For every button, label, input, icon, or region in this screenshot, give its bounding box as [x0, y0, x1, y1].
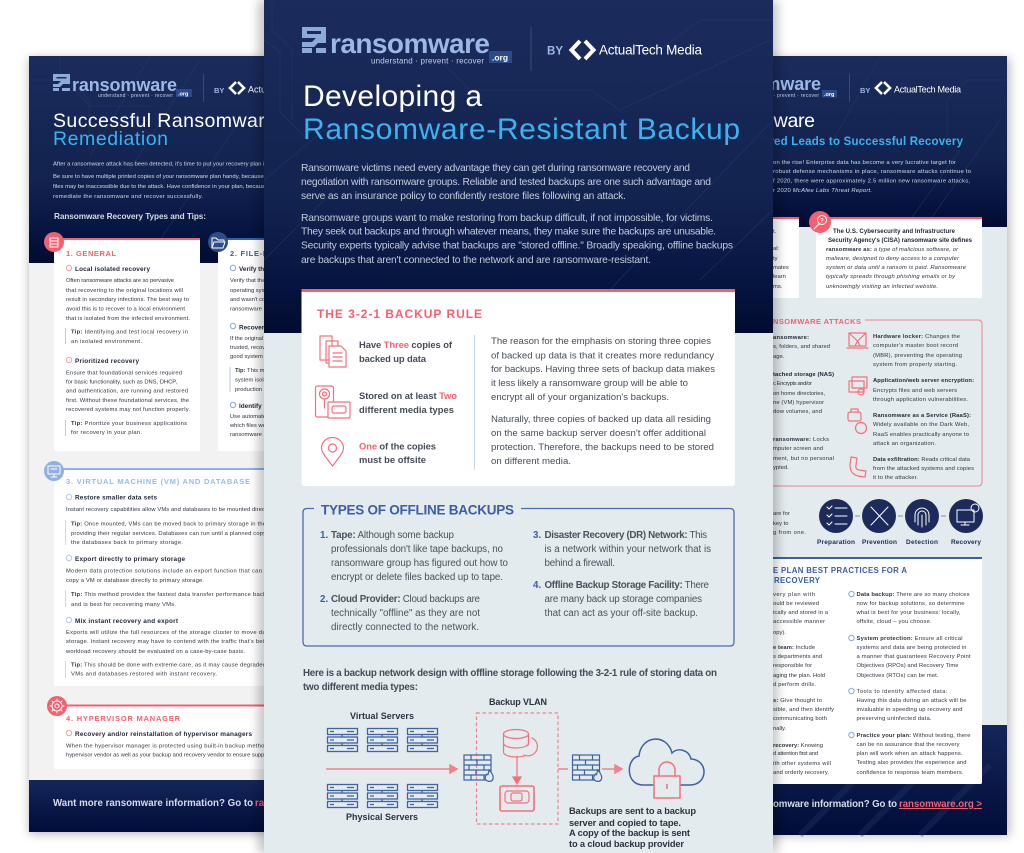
footer band: omware information? Go to — [773, 799, 897, 810]
intro text — [301, 163, 733, 266]
arrow: database to tape — [513, 756, 521, 784]
card: plan best practices: e team: Include — [773, 645, 815, 651]
card: 4. Hypervisor manager: When the hypervisor manager is protected using built-in backup methods — [66, 744, 271, 750]
logo: ransomware.org small: ransomware — [72, 75, 177, 95]
card: 2. File-level: production — [235, 387, 262, 393]
card: plan best practices: s departments and — [773, 654, 822, 660]
card: 3. Virtual machine and database: Modern data protection solutions include an export function that can be — [66, 569, 271, 575]
by ActualTech Media — [547, 41, 702, 59]
list: cloud provider: technically "offline" as they are not — [331, 608, 480, 619]
card: plan best practices: ically and stored in a — [773, 610, 829, 616]
card: small definition card: t. — [773, 229, 777, 235]
card: 1. General: for recovery in your plan. — [71, 430, 142, 436]
card: 3. Virtual machine and database: and is best for recovering many VMs. — [71, 602, 176, 608]
card: 1. General: 1. GENERAL — [66, 249, 116, 258]
card: 3. Virtual machine and database: Tip: Once mounted, VMs can be moved back to primary storage in the — [71, 522, 266, 528]
text: explanation: Naturally, three copies of backed up data all residing — [491, 414, 711, 425]
card: plan best practices: ould be reviewed — [773, 601, 819, 607]
icon: gear — [47, 696, 67, 716]
text: diagram caption — [569, 806, 696, 849]
card: 2. File-level: ransomware — [230, 306, 262, 312]
diagram: backup network — [326, 697, 704, 849]
panel: ransomware attacks: through application vulnerabilities. — [873, 397, 968, 403]
process flow: preparation to recovery — [817, 499, 983, 546]
card: 2. File-level: and wasn't compromised — [230, 297, 294, 303]
title: Being Prepared Leads to Successful Recovery — [700, 136, 964, 148]
panel: ransomware attacks: Application/web server encryption: — [873, 378, 974, 384]
card: 1. General: Local isolated recovery — [75, 266, 150, 273]
process flow: preparation to recovery: Preparation — [817, 539, 855, 546]
intro text: Ransomware victims need every advantage they can get during ransomware recovery and — [301, 163, 690, 174]
card: 1. General: Prioritized recovery — [75, 358, 139, 365]
list: cloud provider: 2. — [320, 594, 328, 605]
card: plan best practices: aging the plan. Hold — [773, 673, 825, 679]
intro text: They seek out backups and through whatever means, they make sure the backups are unusable. — [301, 226, 716, 238]
card: 3. Virtual machine and database — [44, 461, 284, 686]
card: 4. Hypervisor manager — [47, 696, 284, 769]
card: plan best practices: Data backup: There are so many choices — [856, 592, 970, 598]
intro text: f 2020, there were approximately 2.5 million new ransomware attacks, — [773, 178, 970, 184]
footer band — [740, 725, 1007, 835]
card: plan best practices: systems and data are being protected in — [856, 645, 966, 651]
panel: ransomware attacks: mputer screen and — [773, 446, 823, 452]
card: plan best practices: System protection: Ensure all critical — [856, 636, 962, 642]
panel: ransomware attacks: c Encrypts and/or — [773, 381, 812, 387]
virtual servers: Virtual Servers — [350, 711, 414, 721]
intro text: files may be inaccessible due to the attack. Have confidence in your plan, because it will help — [53, 184, 296, 190]
title: Ransomware-Resistant Backup — [303, 113, 740, 146]
panel: ransomware attacks: it to the attacker. — [873, 475, 918, 481]
card: 2. File-level: operating system — [230, 288, 274, 294]
panel: ransomware attacks: Data exfiltration: Reads critical data — [873, 457, 971, 463]
card: 1. General: Tip: Identifying and test local recovery in — [71, 330, 188, 336]
card: plan best practices: can be no assurance that the recovery — [856, 742, 960, 748]
card: plan best practices: Practice your plan: Without testing, there — [856, 733, 970, 739]
footer band: ransomware.org > — [899, 799, 982, 810]
text: one offsite: One of the copies — [359, 440, 436, 452]
text: network intro: two different media types: — [303, 682, 418, 693]
intro text: remediate the ransomware and recover successfully. — [53, 194, 203, 200]
panel: ransomware attacks: ransomware: Locks — [773, 437, 829, 443]
title — [700, 110, 964, 148]
arrow: servers to firewall — [326, 765, 457, 773]
by ActualTech Media: BY — [860, 86, 870, 95]
panel: ransomware attacks: ment, but no personal — [773, 456, 834, 462]
icon: magnet — [850, 457, 866, 477]
subheading: Ransomware Recovery Types and Tips: — [54, 212, 206, 221]
text: two media types: different media types — [359, 404, 454, 415]
card: small definition card: mates — [773, 265, 789, 271]
intro text: After a ransomware attack has been detected, it's time to put your recovery plan into action. — [53, 162, 292, 168]
text: network intro: Here is a backup network design with offline storage following the 3-2-1 rule of storing data on — [303, 668, 717, 679]
logo: ransomware.org small: ransomware — [716, 74, 821, 94]
icon: monitor — [44, 461, 64, 481]
panel: ransomware attacks: Ransomware as a Service (RaaS): — [873, 413, 971, 419]
intro text: r 2020 McAfee Labs Threat Report. — [773, 188, 872, 194]
text: diagram caption: to a cloud backup provider — [569, 839, 684, 849]
text: three copies — [359, 339, 453, 364]
list: cloud provider: directly connected to the network. — [331, 622, 479, 633]
panel: ransomware attacks: Widely available on the Dark Web, — [873, 422, 969, 428]
card: plan best practices: E PLAN BEST PRACTICES FOR A — [773, 566, 907, 575]
card: 1. General: recovered systems may not function properly. — [66, 407, 190, 413]
card: 2. File-level: Recovered — [239, 324, 272, 332]
logo: ransomware.org: ransomware — [330, 28, 490, 59]
panel: ransomware attacks: NSOMWARE ATTACKS — [773, 317, 861, 326]
card: 3. Virtual machine and database: 3. VIRTUAL MACHINE (VM) AND DATABASE — [66, 477, 250, 486]
backup VLAN — [476, 697, 558, 824]
list: disaster recovery: Disaster Recovery (DR) Network: This — [544, 530, 707, 541]
title: Ransomware — [703, 110, 815, 132]
card: CISA definition: malware, designed to deny access to a computer — [826, 256, 960, 262]
card: 2. File-level: good system — [230, 354, 263, 360]
icon: hardware locker — [847, 333, 868, 348]
list: tape — [320, 530, 509, 583]
intro text: serve as an insurance policy to confidently restore files following an attack. — [301, 191, 626, 202]
card: 3. Virtual machine and database: copy a VM or database directly to primary storage. — [66, 578, 204, 584]
card: small definition card: ty — [773, 256, 778, 262]
text: diagram caption: server and copied to tape. — [569, 818, 681, 828]
icon: firewall 2 — [572, 755, 602, 781]
card: 3. Virtual machine and database: Restore smaller data sets — [75, 494, 157, 502]
text: process intro fragment: g from one. — [773, 530, 806, 536]
card: plan best practices: Tools to identify affected data: — [856, 689, 948, 695]
by ActualTech Media: BY — [214, 86, 224, 95]
icon: firewall 1 — [464, 755, 493, 781]
by ActualTech Media: ActualTech — [248, 84, 292, 94]
heading: THE 3-2-1 BACKUP RULE — [317, 307, 482, 321]
footer band — [29, 780, 330, 832]
panel: ransomware attacks: from the attacked systems and copies — [873, 466, 974, 472]
card: plan best practices: a manner that guarantees Recovery Point — [856, 654, 971, 660]
card: plan best practices: sible, and then identify — [773, 707, 834, 713]
by ActualTech Media — [214, 82, 292, 95]
title — [53, 110, 276, 150]
logo: ransomware.org small — [716, 74, 837, 99]
list: tape: professionals don't like tape backups, no — [331, 544, 504, 555]
icon: general recovery — [44, 232, 64, 252]
card: plan best practices: now for backup solutions, so determine — [856, 601, 964, 607]
card: plan best practices: responsible for — [773, 663, 812, 669]
intro text: negotiation with ransomware groups. Reliable and tested backups are one such advantage and — [301, 177, 711, 188]
title: Remediation — [53, 128, 168, 150]
card: 3. Virtual machine and database: Mix instant recovery and export — [75, 618, 179, 625]
text: explanation — [491, 336, 715, 467]
panel: ransomware attacks: RaaS enables practically anyone to — [873, 432, 969, 438]
physical servers: Physical Servers — [346, 812, 418, 822]
card: 3. Virtual machine and database: the databases back to primary storage. — [71, 540, 183, 546]
intro text — [773, 160, 972, 194]
card: plan best practices: offsite, cloud – you choose. — [856, 619, 932, 625]
text: two media types — [359, 390, 457, 415]
card: plan best practices: RECOVERY — [774, 576, 821, 585]
card: CISA definition: typically spreads through phishing emails or by — [826, 274, 956, 280]
panel: ransomware attacks: Hardware locker: Changes the — [873, 334, 960, 340]
card: 1. General: avoid this is to recover to a local environment — [66, 306, 185, 312]
logo: ransomware.org: .org — [492, 52, 508, 62]
card: plan best practices: Testing also provides the experience and — [856, 760, 966, 766]
card: CISA definition: system or data until a ransom is paid. Ransomware — [826, 265, 967, 271]
card: CISA definition: Security Agency's (CISA) ransomware site defines — [828, 237, 973, 244]
card: CISA definition: ransomware as: a type of malicious software, or — [826, 247, 959, 253]
card: 2. File-level: If the original — [230, 336, 263, 342]
logo: ransomware.org small: .org — [824, 92, 834, 98]
card: 3. Virtual machine and database: Tip: This method provides the fastest data transfer performance back — [71, 592, 266, 598]
backup VLAN: Backup VLAN — [489, 697, 547, 707]
virtual servers — [328, 711, 438, 752]
process flow: preparation to recovery: Recovery — [951, 539, 981, 546]
panel: center page, Developing a Ransomware-Resistant Backup — [258, 0, 778, 853]
card: small definition card — [745, 217, 799, 298]
icon: drive and tape — [316, 386, 350, 418]
card: 1. General: Ensure that foundational services required — [66, 370, 182, 376]
card: plan best practices: invaluable in speeding up recovery and — [856, 707, 962, 713]
text: explanation: on different media. — [491, 456, 571, 467]
card: 2. File-level: 2. FILE-LEVEL — [230, 249, 290, 258]
icon: cloud with lock — [629, 739, 704, 798]
card: 2. File-level: Verify the — [239, 266, 268, 273]
text: three copies: backed up data — [359, 353, 427, 364]
list: disaster recovery: is a network within your network that is — [544, 544, 711, 555]
text: one offsite: must be offsite — [359, 454, 426, 465]
panel: ransomware attacks: Encrypts files and web servers — [873, 388, 957, 394]
text: process intro fragment — [773, 511, 806, 536]
list: tape: encrypt or delete files backed up to tape. — [331, 572, 503, 583]
icon: database — [504, 730, 537, 757]
list: offline storage facility: Offline Backup Storage Facility: There — [544, 580, 710, 591]
intro text: Security experts typically advise that backups are "stored offline." Broadly speaking, offline backups — [301, 240, 733, 252]
card: plan best practices: very plan with — [773, 592, 815, 598]
card: 3. Virtual machine and database: storage. Instant recovery may have to contend with the traffic that's being — [66, 639, 271, 645]
text: explanation: encrypt all of your organization's backups. — [491, 392, 669, 403]
card: 1. General: first. Without these foundational services, the — [66, 398, 189, 404]
card: plan best practices: s: Give thought to — [773, 698, 822, 704]
card: 2. File-level: Tip: This may — [235, 368, 271, 374]
panel: the 3-2-1 backup rule — [302, 289, 735, 486]
list: offline storage facility — [533, 580, 710, 619]
list: disaster recovery — [533, 530, 711, 569]
text: process intro fragment: are for — [773, 511, 790, 517]
card: plan best practices: recovery: Knowing — [773, 743, 823, 749]
list: disaster recovery: behind a firewall. — [544, 558, 615, 569]
card: small definition card: ms. — [773, 284, 783, 290]
card: 1. General: that recovering to the original locations will — [66, 288, 183, 294]
arrow: firewall to cloud — [602, 765, 622, 773]
footer band: Want more ransomware information? Go to — [53, 798, 253, 809]
logo: ransomware.org small — [53, 74, 192, 99]
card: 1. General: Tip: Prioritize your business applications — [71, 421, 187, 427]
by ActualTech Media: BY — [547, 46, 563, 58]
card: 1. General: that is isolated from the infected environment. — [66, 316, 190, 322]
panel: ransomware attacks: ypted. — [773, 465, 789, 471]
card: 1. General: result in secondary infections. The best way to — [66, 297, 189, 303]
list: offline storage facility: 4. — [533, 580, 541, 591]
card: CISA definition: unknowingly visiting an infected website. — [826, 284, 938, 290]
text: explanation: of backed up data is that it creates more redundancy — [491, 350, 714, 362]
logo: ransomware.org small: understand · prevent · recover — [744, 93, 819, 99]
connector to firewall 2 — [558, 768, 568, 770]
card: plan best practices: preserving uninfected data. — [856, 716, 932, 722]
logo: ransomware.org: understand · prevent · recover — [371, 56, 484, 66]
intro text: Be sure to have multiple printed copies of your ransomware plan handy, because your — [53, 174, 277, 180]
intro text: are backups that aren't connected to the network and are ransomware-resistant. — [301, 255, 651, 266]
logo: ransomware.org — [302, 27, 512, 66]
card: plan best practices: Objectives (RPOs) and Recovery Time — [856, 663, 958, 669]
panel: ransomware attacks — [745, 317, 982, 486]
card: 1. General: and authentication, are running and restored — [66, 388, 188, 394]
card: 2. File-level: Identify — [239, 403, 262, 410]
panel: ransomware attacks: dow volumes, and — [773, 409, 822, 415]
list: cloud provider — [320, 594, 481, 633]
panel: ransomware attacks: system from properly starting. — [873, 362, 957, 368]
icon: documents — [320, 336, 346, 367]
card: plan best practices: opy). — [773, 630, 786, 636]
list: tape: 1. — [320, 530, 328, 541]
card: plan best practices — [745, 557, 982, 784]
panel: ransomware attacks: attack an organization. — [873, 441, 936, 447]
text: explanation: protection. Therefore, the backups need to be stored — [491, 442, 714, 453]
card: plan best practices: d attention first and — [773, 751, 818, 757]
panel: ransomware attacks: ne (VM) hypervisor — [773, 400, 824, 406]
heading: TYPES OF OFFLINE BACKUPS — [321, 502, 514, 518]
panel: ransomware attacks: s, folders, and shared — [773, 344, 830, 350]
card: CISA definition — [809, 211, 982, 298]
text: one offsite — [359, 440, 436, 465]
process flow: preparation to recovery: Detection — [906, 539, 938, 546]
card: small definition card: al: — [773, 246, 780, 252]
card: plan best practices: Objectives (RTOs) can be met. — [856, 673, 939, 679]
text: explanation: it less likely a ransomware group will be able to — [491, 378, 688, 389]
text: explanation: for backups. Having three sets of backup data makes — [491, 364, 715, 375]
list: tape: ransomware group has figured out how to — [331, 558, 509, 569]
card: plan best practices: and orderly recovery. — [773, 770, 829, 776]
intro text: robust defense mechanisms in place, ransomware attacks continue to — [773, 169, 972, 175]
text: diagram caption: A copy of the backup is sent — [569, 828, 690, 838]
icon: application encryption — [849, 377, 867, 395]
card: 4. Hypervisor manager: Recovery and/or reinstallation of hypervisor managers — [75, 731, 252, 738]
card: 3. Virtual machine and database: Exports will utilize the full resources of the storage cluster to move data — [66, 630, 272, 636]
title: Developing a — [303, 80, 482, 113]
text: process intro fragment: key to — [773, 521, 788, 527]
card: plan best practices: confidence to response team members. — [856, 770, 964, 776]
card: 2. File-level — [208, 232, 294, 451]
card: plan best practices: what is best for your business: locally, — [856, 610, 961, 616]
card: 2. File-level: ransomware — [230, 432, 262, 438]
panel: left page, Successful Ransomware Remediation — [29, 56, 330, 834]
card: 2. File-level: Verify that the — [230, 278, 265, 284]
card: 2. File-level: Use automated — [230, 414, 269, 420]
by ActualTech Media: ActualTech Media — [894, 84, 961, 94]
logo: ransomware.org small: .org — [178, 92, 188, 98]
card: 2. File-level: which files were — [229, 423, 271, 429]
icon: folder — [208, 232, 228, 252]
intro text: on the rise! Enterprise data has become a very lucrative target for — [773, 160, 956, 166]
card: 2. File-level: system isolated — [235, 378, 275, 384]
card: 3. Virtual machine and database: Tip: This should be done with extreme care, as it may cause degraded — [71, 663, 266, 669]
footer band: ransomware.org — [255, 798, 330, 809]
card: 4. Hypervisor manager: hypervisor vendor as well as your backup and recovery vendor to ensure support — [66, 753, 271, 759]
card: plan best practices: nally. — [773, 726, 786, 732]
icon: magnifier — [809, 211, 831, 233]
intro text: Ransomware groups want to make restoring from backup difficult, if not impossible, for victims. — [301, 213, 713, 224]
card: 4. Hypervisor manager: 4. HYPERVISOR MANAGER — [66, 714, 181, 723]
title: Successful Ransomware — [53, 110, 276, 132]
card: plan best practices: ith other systems will — [773, 761, 831, 767]
panel: right page, Ransomware overview — [700, 56, 1010, 836]
logo: ransomware.org small: understand · prevent · recover — [98, 93, 173, 99]
text: two media types: Stored on at least Two — [359, 390, 457, 401]
list: offline storage facility: are many back up storage companies — [544, 594, 702, 605]
list: tape: Tape: Although some backup — [331, 530, 455, 541]
list: offline storage facility: that can act as your off-site backup. — [544, 608, 698, 619]
physical servers — [328, 784, 438, 822]
card: CISA definition: The U.S. Cybersecurity and Infrastructure — [833, 228, 956, 235]
card: 2. File-level: trusted, recover — [230, 345, 270, 351]
panel: ransomware attacks: on home directories, — [773, 391, 825, 397]
panel: ransomware attacks: ansomware: — [773, 335, 809, 341]
panel: types of offline backups — [303, 502, 734, 646]
panel: ransomware attacks: tached storage (NAS) — [773, 372, 834, 378]
card: plan best practices: d perform drills. — [773, 682, 816, 688]
intro text — [53, 162, 296, 200]
card: 3. Virtual machine and database: workload recovery should be evaluated on a case-by-case basis. — [65, 649, 245, 655]
card: small definition card: learn — [773, 274, 786, 280]
panel: ransomware attacks: computer's master boot record — [873, 343, 958, 349]
icon: tape — [500, 786, 534, 811]
card: 3. Virtual machine and database: VMs and databases restored with instant recovery. — [71, 672, 217, 678]
text: diagram caption: Backups are sent to a backup — [569, 806, 696, 816]
list: disaster recovery: 3. — [533, 530, 541, 541]
card: 1. General: for basic functionality, such as DNS, DHCP, — [66, 380, 177, 386]
text: explanation: on the same backup server doesn't offer additional — [491, 428, 706, 439]
card: 1. General — [44, 232, 200, 451]
by ActualTech Media — [860, 82, 961, 95]
text: explanation: The reason for the emphasis on storing three copies — [491, 336, 711, 347]
icon: ransomware as a service — [848, 409, 866, 434]
title — [303, 80, 740, 146]
card: 3. Virtual machine and database: Export directly to primary storage — [75, 556, 185, 563]
by ActualTech Media: ActualTech Media — [599, 42, 702, 58]
icon: location pin — [322, 438, 344, 466]
card: plan best practices: accessible manner — [773, 619, 825, 625]
list: cloud provider: Cloud Provider: Cloud backups are — [331, 594, 481, 605]
icon: magnifier: ? — [820, 218, 824, 224]
card: plan best practices: Having this data during an attack will be — [856, 698, 966, 704]
panel: ransomware attacks: age. — [773, 354, 785, 360]
text: network intro — [303, 668, 717, 693]
card: 1. General: Often ransomware attacks are so pervasive — [66, 278, 174, 284]
card: 1. General: an isolated environment. — [71, 339, 142, 345]
card: plan best practices: communicating both — [773, 716, 827, 722]
card: 3. Virtual machine and database: Instant recovery capabilities allow VMs and databases to be mounted directly — [66, 507, 271, 513]
card: 3. Virtual machine and database: providing their regular services. Databases can run until a planned copy — [71, 531, 266, 537]
panel: ransomware attacks: (MBR), preventing the operating — [873, 353, 962, 359]
process flow: preparation to recovery: Prevention — [862, 539, 897, 546]
text: three copies: Have Three copies of — [359, 339, 453, 350]
card: plan best practices: plan will work when an attack happens. — [856, 751, 963, 757]
